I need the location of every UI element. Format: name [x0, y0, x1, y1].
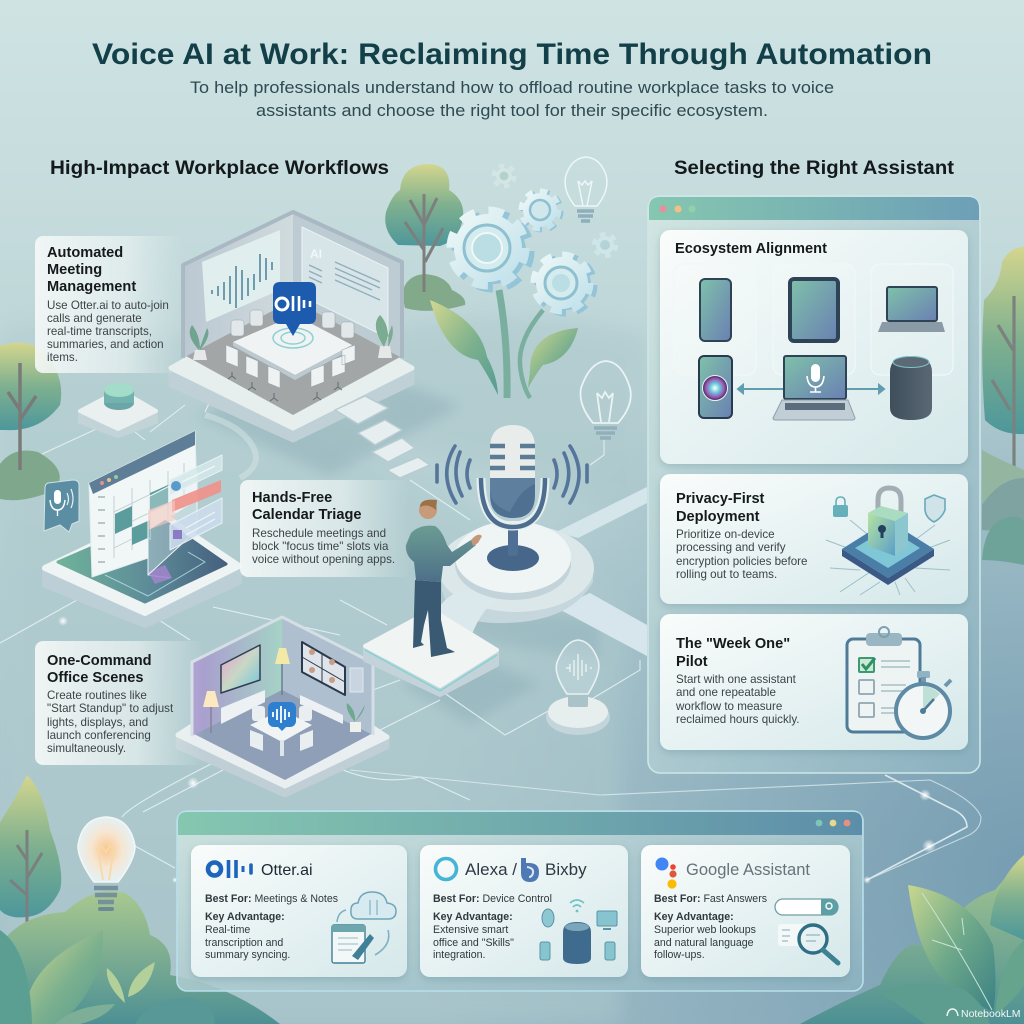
card: Otter.ai: Otter.ai — [261, 862, 313, 879]
mic stand — [487, 545, 539, 571]
callout: office scenes: Create routines like — [47, 689, 147, 702]
wall right — [293, 212, 402, 358]
icon: bulb top right of gears — [565, 157, 607, 221]
tree: bottom left — [0, 775, 61, 952]
watermark: NotebookLM — [961, 1008, 1021, 1020]
card: Otter.ai: summary syncing. — [205, 949, 290, 961]
wall left — [183, 212, 293, 358]
callout: automated meeting: Meeting — [47, 262, 102, 278]
platform — [45, 513, 239, 625]
card: Alexa Bixby: Bixby — [545, 860, 587, 879]
server node — [80, 383, 156, 436]
transparent pane — [148, 472, 197, 575]
callout: automated meeting: real-time transcripts, — [47, 325, 152, 338]
callout: office scenes: launch conferencing — [47, 729, 151, 742]
card: Google Assistant: and natural language — [654, 937, 754, 949]
left screen waveform — [202, 230, 280, 322]
chairs back — [231, 310, 354, 338]
logo: Otter — [208, 860, 251, 878]
callout: automated meeting: Management — [47, 279, 136, 295]
tree: top centre — [385, 164, 465, 311]
card: week one pilot: reclaimed hours quickly. — [676, 713, 800, 726]
card: Alexa Bixby: integration. — [433, 949, 485, 961]
subtitle: To help professionals understand how to offload routine workplace tasks to voice — [190, 78, 834, 97]
card: Google Assistant: Best For: Fast Answers — [654, 893, 767, 905]
right screen AI — [302, 227, 388, 338]
desks — [221, 690, 265, 724]
callout: automated meeting: Use Otter.ai to auto-join — [47, 299, 169, 312]
table and chairs — [252, 706, 265, 721]
meeting room illustration — [171, 212, 412, 440]
icon: Otter badge — [273, 282, 316, 336]
callout: automated meeting: summaries, and action — [47, 338, 164, 351]
callout: office scenes: Office Scenes — [47, 670, 144, 686]
lamps — [281, 652, 283, 695]
icon: clipboard and stopwatch — [847, 627, 951, 738]
card: Alexa Bixby: Alexa / — [465, 860, 517, 879]
icon: smart home — [540, 900, 617, 964]
glowing dots — [58, 580, 936, 884]
connector paths — [0, 397, 981, 884]
mic head — [490, 425, 535, 478]
callout: automated meeting — [35, 236, 185, 373]
central microphone on platform — [430, 425, 594, 640]
card: ecosystem alignment — [660, 230, 968, 464]
card: Alexa Bixby — [420, 845, 628, 977]
card: Alexa Bixby: office and "Skills" — [433, 937, 514, 949]
office scenes room — [178, 617, 387, 795]
arrows — [738, 385, 884, 393]
gear: small — [522, 192, 560, 229]
plants — [193, 346, 392, 360]
heading: workflows: High-Impact Workplace Workflows — [50, 157, 389, 179]
icon: glowing bulb bottom left — [78, 817, 135, 909]
calendar panel — [89, 431, 197, 577]
chairs front — [226, 345, 355, 388]
callout: office scenes: lights, displays, and — [47, 716, 148, 729]
callout: calendar triage: voice without opening apps. — [252, 553, 395, 566]
panel: tool comparison — [177, 811, 863, 991]
callout: office scenes: simultaneously. — [47, 742, 126, 755]
card: privacy-first deployment — [660, 474, 968, 604]
card: privacy-first deployment: Deployment — [676, 509, 760, 525]
video call screen — [302, 642, 345, 695]
floor — [186, 298, 402, 415]
logo: Alexa — [436, 858, 456, 880]
icon: laptop with mic — [773, 356, 855, 420]
callout: calendar triage — [240, 480, 410, 577]
card: week one pilot: and one repeatable — [676, 686, 776, 699]
logo: Google dots — [656, 858, 677, 889]
card: Otter.ai: Real-time — [205, 924, 250, 936]
steps — [335, 396, 430, 478]
icon: bulb on pedestal — [546, 640, 610, 735]
icon: lock on chip — [826, 488, 950, 595]
card: week one pilot: Pilot — [676, 654, 708, 670]
icon: phone — [700, 279, 731, 341]
card: privacy-first deployment: Prioritize on-device — [676, 528, 775, 541]
icon: phone with assistant — [699, 356, 732, 418]
title: Voice AI at Work: Reclaiming Time Through Automation — [92, 38, 932, 71]
gear: medium — [535, 256, 593, 312]
card: privacy-first deployment: Privacy-First — [676, 491, 765, 507]
calendar illustration — [45, 431, 239, 625]
card: Alexa Bixby: Key Advantage: — [433, 911, 513, 923]
card: Otter.ai — [191, 845, 407, 977]
icon: search — [775, 899, 838, 963]
card: privacy-first deployment: encryption policies before — [676, 555, 807, 568]
plant stem and leaves — [430, 290, 578, 398]
callout: automated meeting: Automated — [47, 245, 123, 261]
callout: office scenes: "Start Standup" to adjust — [47, 702, 174, 715]
subtitle: assistants and choose the right tool for their specific ecosystem. — [256, 101, 768, 120]
callout: office scenes — [35, 641, 205, 765]
card: Google Assistant: Superior web lookups — [654, 924, 756, 936]
floating event cards — [170, 455, 222, 495]
panel: selecting the right assistant — [648, 196, 980, 773]
card: ecosystem alignment: Ecosystem Alignment — [675, 241, 827, 257]
icon: voice chat bubble — [44, 480, 79, 532]
tree: left — [0, 342, 61, 500]
card: Google Assistant: Google Assistant — [686, 860, 810, 879]
heading: assistants: Selecting the Right Assistant — [674, 157, 955, 179]
screen colorful — [221, 645, 260, 693]
card: week one pilot: Start with one assistant — [676, 673, 797, 686]
icon: laptop — [878, 287, 945, 332]
callout: office scenes: One-Command — [47, 653, 152, 669]
callout: calendar triage: Reschedule meetings and — [252, 527, 386, 540]
tree: right — [982, 247, 1024, 565]
card: Google Assistant: follow-ups. — [654, 949, 705, 961]
callout: calendar triage: Calendar Triage — [252, 507, 362, 523]
card: Google Assistant — [641, 845, 850, 977]
foliage bottom left — [0, 891, 280, 1024]
icon: tablet — [790, 279, 838, 341]
icon: voice badge — [268, 702, 296, 731]
card: week one pilot: The "Week One" — [676, 636, 790, 652]
platform — [171, 305, 412, 440]
card: Otter.ai: Best For: Meetings & Notes — [205, 893, 338, 905]
plant — [350, 722, 361, 732]
card: Alexa Bixby: Best For: Device Control — [433, 893, 552, 905]
table — [233, 315, 352, 375]
callout: automated meeting: items. — [47, 351, 78, 364]
card: privacy-first deployment: processing and verify — [676, 541, 786, 554]
foliage bottom right — [800, 855, 1024, 1024]
card: Alexa Bixby: Extensive smart — [433, 924, 508, 936]
sound waves — [437, 446, 587, 503]
person on platform — [365, 500, 497, 695]
card: week one pilot — [660, 614, 968, 750]
callout: calendar triage: block "focus time" slots via — [252, 540, 389, 553]
gear: large — [452, 212, 529, 287]
gears illustration — [430, 167, 615, 398]
card: week one pilot: workflow to measure — [675, 700, 782, 713]
card: Otter.ai: Key Advantage: — [205, 911, 285, 923]
logo: Bixby — [521, 858, 539, 882]
callout: calendar triage: Hands-Free — [252, 490, 332, 506]
callout: automated meeting: calls and generate — [47, 312, 142, 325]
right screen AI: AI — [310, 247, 322, 261]
card: Google Assistant: Key Advantage: — [654, 911, 734, 923]
card: privacy-first deployment: rolling out to teams. — [676, 568, 777, 581]
card: Otter.ai: transcription and — [205, 937, 283, 949]
icon: cloud and note — [332, 892, 396, 963]
icon: bulb near mic — [580, 361, 631, 438]
subtitle — [190, 78, 834, 120]
icon: smart speaker — [890, 356, 932, 420]
